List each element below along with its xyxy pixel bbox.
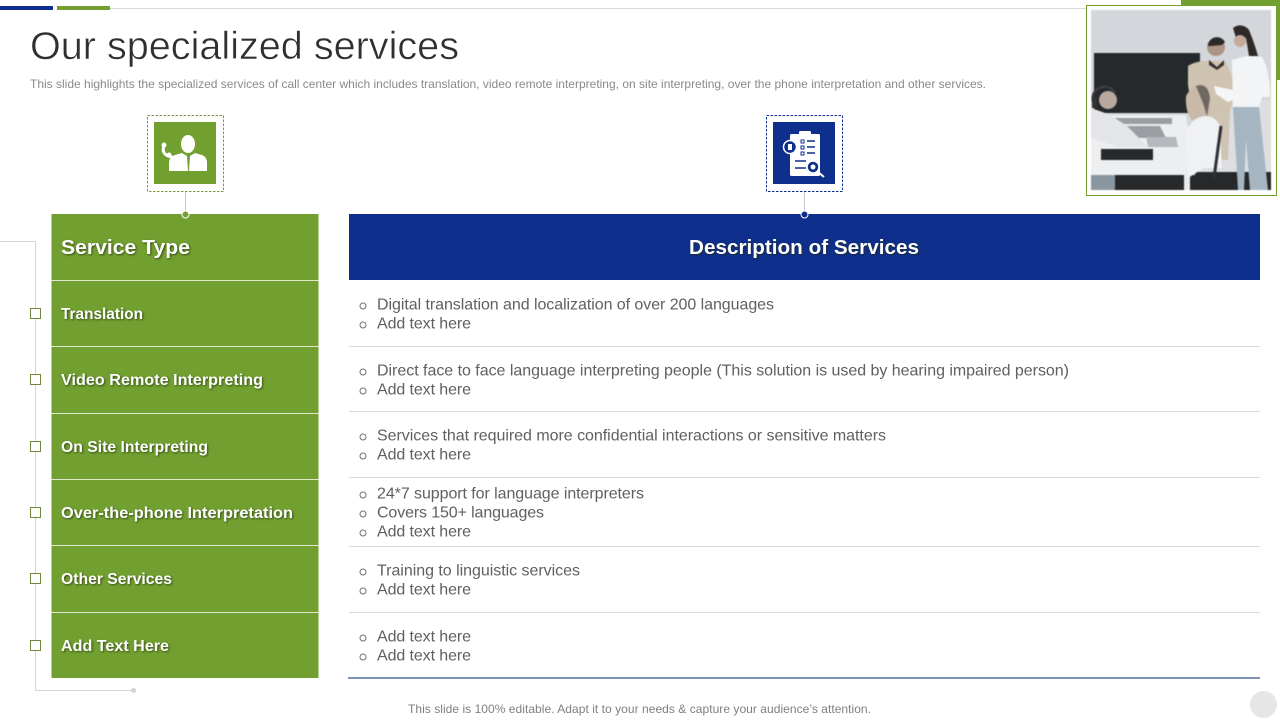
row label: video remote interpreting: Video Remote Interpreting bbox=[61, 372, 263, 389]
description: other services bbox=[360, 562, 580, 598]
row dividers bbox=[348, 346, 1260, 679]
row label: add text here: Add Text Here bbox=[61, 638, 169, 655]
left bracket line with checkboxes bbox=[0, 242, 136, 693]
description: video remote interpreting: Add text here bbox=[377, 382, 471, 398]
left connector bbox=[182, 192, 189, 218]
row label: on site interpreting: On Site Interpreting bbox=[61, 439, 208, 456]
seated woman bbox=[1186, 84, 1210, 120]
left icon: call center agent bbox=[148, 116, 224, 192]
papers bbox=[1214, 86, 1240, 102]
description: over-the-phone interpretation: 24*7 support for language interpreters bbox=[377, 486, 644, 502]
photo: call center team bbox=[1086, 6, 1276, 196]
description: translation: Add text here bbox=[377, 316, 471, 332]
row label: over-the-phone interpretation: Over-the-phone Interpretation bbox=[61, 505, 293, 522]
heading: service type: Service Type bbox=[61, 237, 190, 259]
table bbox=[1091, 115, 1195, 175]
description: add text here: Add text here bbox=[377, 628, 471, 646]
description: over-the-phone interpretation: Covers 150+ languages bbox=[377, 504, 544, 522]
wall lower right bbox=[1200, 100, 1271, 175]
standing woman bbox=[1233, 25, 1258, 56]
footer note: This slide is 100% editable. Adapt it to your needs & capture your audience’s attention. bbox=[408, 702, 871, 716]
description: on site interpreting: Services that required more confidential interactions or sensitive matters bbox=[377, 428, 886, 444]
description: video remote interpreting: Direct face to face language interpreting people (This solution is used by hearing impaired person) bbox=[377, 362, 1069, 380]
title: Our specialized services bbox=[30, 25, 459, 68]
description: over-the-phone interpretation bbox=[360, 486, 644, 540]
description: on site interpreting: Add text here bbox=[377, 446, 471, 464]
panel: service type column bbox=[52, 214, 318, 678]
standing man bbox=[1188, 61, 1236, 160]
description: other services: Add text here bbox=[377, 582, 471, 598]
laptop bbox=[1101, 149, 1153, 160]
monitor bbox=[1094, 53, 1200, 113]
description: other services: Training to linguistic services bbox=[377, 562, 580, 580]
description: add text here bbox=[360, 628, 471, 664]
description: on site interpreting bbox=[360, 428, 886, 464]
description: video remote interpreting bbox=[360, 362, 1069, 398]
panel: description header bbox=[349, 214, 1260, 280]
row label: other services: Other Services bbox=[61, 571, 172, 588]
man at left bbox=[1091, 108, 1148, 147]
page number circle bbox=[1250, 691, 1277, 718]
floor bbox=[1091, 172, 1271, 190]
right icon: checklist with magnifier bbox=[766, 116, 842, 192]
description: translation bbox=[360, 296, 774, 332]
right connector bbox=[801, 192, 808, 218]
subtitle: This slide highlights the specialized services of call center which includes translation, video remote interpreting, on site interpreting, over the phone interpretation and other services. bbox=[30, 77, 986, 91]
description: translation: Digital translation and localization of over 200 languages bbox=[377, 296, 774, 314]
description: over-the-phone interpretation: Add text here bbox=[377, 524, 471, 540]
row label: translation: Translation bbox=[61, 306, 143, 323]
description: add text here: Add text here bbox=[377, 648, 471, 664]
top accent bars bbox=[0, 0, 1280, 80]
panel: description header: Description of Services bbox=[689, 237, 919, 259]
